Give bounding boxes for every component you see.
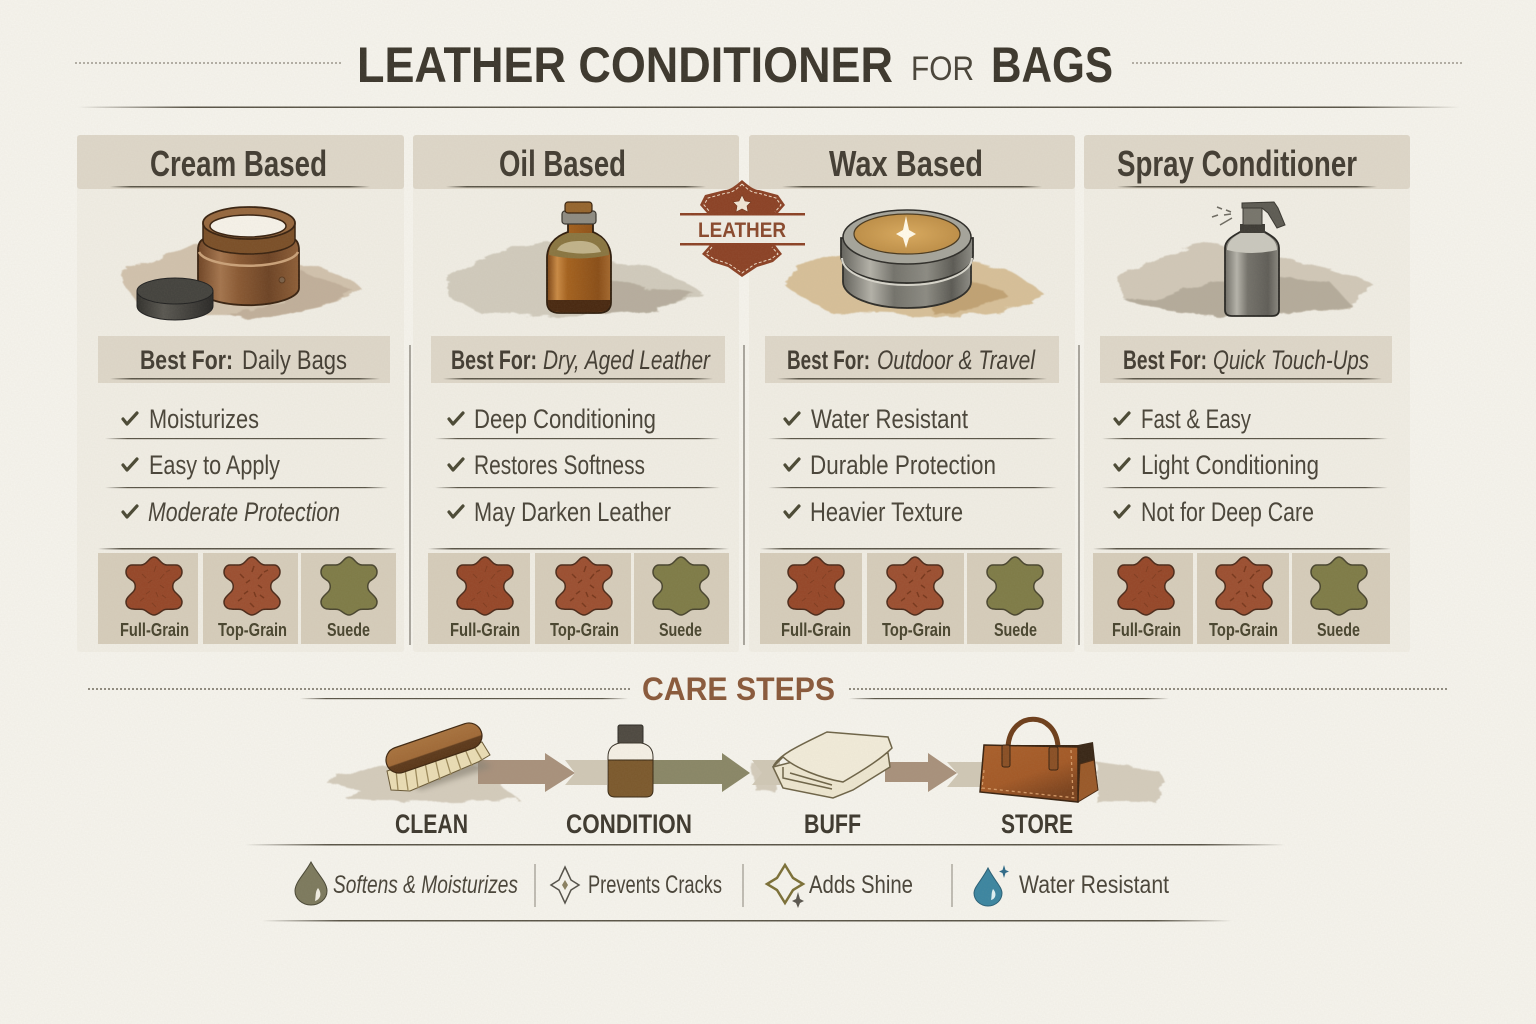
- feature list: oil: May Darken Leather: [474, 497, 671, 527]
- leather types: cream: Suede: [327, 620, 370, 640]
- leather types: oil: Top-Grain: [550, 620, 619, 640]
- best for: daily bags: Daily Bags: [242, 345, 347, 375]
- leather types: oil: Full-Grain: [450, 620, 520, 640]
- leather types: wax: Full-Grain: [781, 620, 851, 640]
- step labels: CONDITION: [566, 809, 692, 839]
- best for: dry, aged leather: Best For:: [451, 345, 537, 375]
- arrow: condition to buff: [653, 753, 750, 792]
- leather types: spray: [1093, 553, 1390, 644]
- illustration: oil bottle: [447, 202, 702, 317]
- benefit: water resistant: Water Resistant: [1019, 871, 1169, 899]
- best for: dry, aged leather: [431, 336, 725, 383]
- icon: leather bag: [980, 719, 1098, 802]
- benefit: adds shine: Adds Shine: [809, 871, 913, 899]
- illustration: spray bottle: [1120, 202, 1373, 316]
- feature list: cream: Moderate Protection: [148, 497, 340, 527]
- header: wax based: Wax Based: [829, 143, 983, 184]
- title: LEATHER CONDITIONER: [357, 37, 893, 93]
- feature list: wax: [768, 404, 1057, 527]
- panel: oil based: [413, 135, 739, 652]
- feature list: oil: Deep Conditioning: [474, 404, 656, 434]
- illustration: cream jar: [122, 207, 364, 320]
- arrow: clean to condition: [478, 753, 575, 792]
- icon: brush: [382, 719, 492, 791]
- best for: daily bags: Best For:: [140, 345, 233, 375]
- leather types: cream: Full-Grain: [120, 620, 189, 640]
- feature list: spray: Not for Deep Care: [1141, 497, 1314, 527]
- leather types: oil: [428, 553, 729, 644]
- background strokes: [326, 762, 1165, 803]
- title: FOR: [911, 50, 974, 88]
- icon: folded towel: [773, 732, 892, 798]
- best for: quick touch-ups: Quick Touch-Ups: [1213, 345, 1369, 375]
- benefit: softens and moisturizes: [295, 862, 518, 905]
- step labels: [395, 809, 1073, 839]
- leather types: oil: Suede: [659, 620, 702, 640]
- icon: conditioner bottle: [608, 725, 653, 797]
- leather types: wax: Top-Grain: [882, 620, 951, 640]
- leather types: wax: Suede: [994, 620, 1037, 640]
- title: BAGS: [991, 37, 1113, 93]
- header: spray conditioner: Spray Conditioner: [1117, 143, 1357, 184]
- illustration: wax tin: [782, 210, 1044, 316]
- step labels: STORE: [1001, 809, 1073, 839]
- care steps heading: CARE STEPS: [642, 671, 835, 707]
- best for: outdoor and travel: Best For:: [787, 345, 870, 375]
- benefit: softens and moisturizes: Softens & Moisturizes: [333, 871, 518, 899]
- header: cream based: [77, 135, 404, 189]
- leather types: spray: Suede: [1317, 620, 1360, 640]
- step labels: CLEAN: [395, 809, 468, 839]
- header: oil based: Oil Based: [499, 143, 626, 184]
- feature list: wax: Water Resistant: [811, 404, 968, 434]
- feature list: cream: Easy to Apply: [149, 450, 280, 480]
- best for: dry, aged leather: Dry, Aged Leather: [543, 345, 711, 375]
- benefit: prevents cracks: Prevents Cracks: [588, 871, 722, 899]
- feature list: spray: Fast & Easy: [1141, 404, 1251, 434]
- benefit: water resistant: [974, 865, 1169, 906]
- leather badge: [680, 180, 805, 277]
- leather types: spray: Top-Grain: [1209, 620, 1278, 640]
- feature list: spray: [1102, 404, 1388, 527]
- feature list: wax: Durable Protection: [810, 450, 996, 480]
- benefit: prevents cracks: [551, 867, 722, 903]
- leather types: spray: Full-Grain: [1112, 620, 1181, 640]
- care steps flow: [326, 719, 1165, 839]
- header: wax based: [749, 135, 1075, 189]
- panel: spray conditioner: [1084, 135, 1410, 652]
- header: spray conditioner: [1084, 135, 1410, 189]
- feature list: spray: Light Conditioning: [1141, 450, 1319, 480]
- step labels: BUFF: [804, 809, 861, 839]
- feature list: cream: Moisturizes: [149, 404, 259, 434]
- feature list: oil: Restores Softness: [474, 450, 645, 480]
- header: oil based: [413, 135, 739, 189]
- best for: quick touch-ups: Best For:: [1123, 345, 1207, 375]
- panel: cream based: [77, 135, 404, 652]
- leather badge: LEATHER: [698, 219, 786, 242]
- leather types: cream: [98, 553, 396, 644]
- feature list: oil: [435, 404, 720, 527]
- leather types: wax: [760, 553, 1062, 644]
- best for: quick touch-ups: [1100, 336, 1392, 383]
- best for: daily bags: [98, 336, 390, 383]
- arrow: buff to store: [885, 753, 957, 792]
- feature list: cream: [105, 404, 388, 527]
- leather types: cream: Top-Grain: [218, 620, 287, 640]
- benefit: adds shine: [767, 865, 913, 908]
- panel: wax based: [749, 135, 1075, 652]
- best for: outdoor and travel: [765, 336, 1059, 383]
- header: cream based: Cream Based: [150, 143, 327, 184]
- feature list: wax: Heavier Texture: [810, 497, 963, 527]
- best for: outdoor and travel: Outdoor & Travel: [877, 345, 1036, 375]
